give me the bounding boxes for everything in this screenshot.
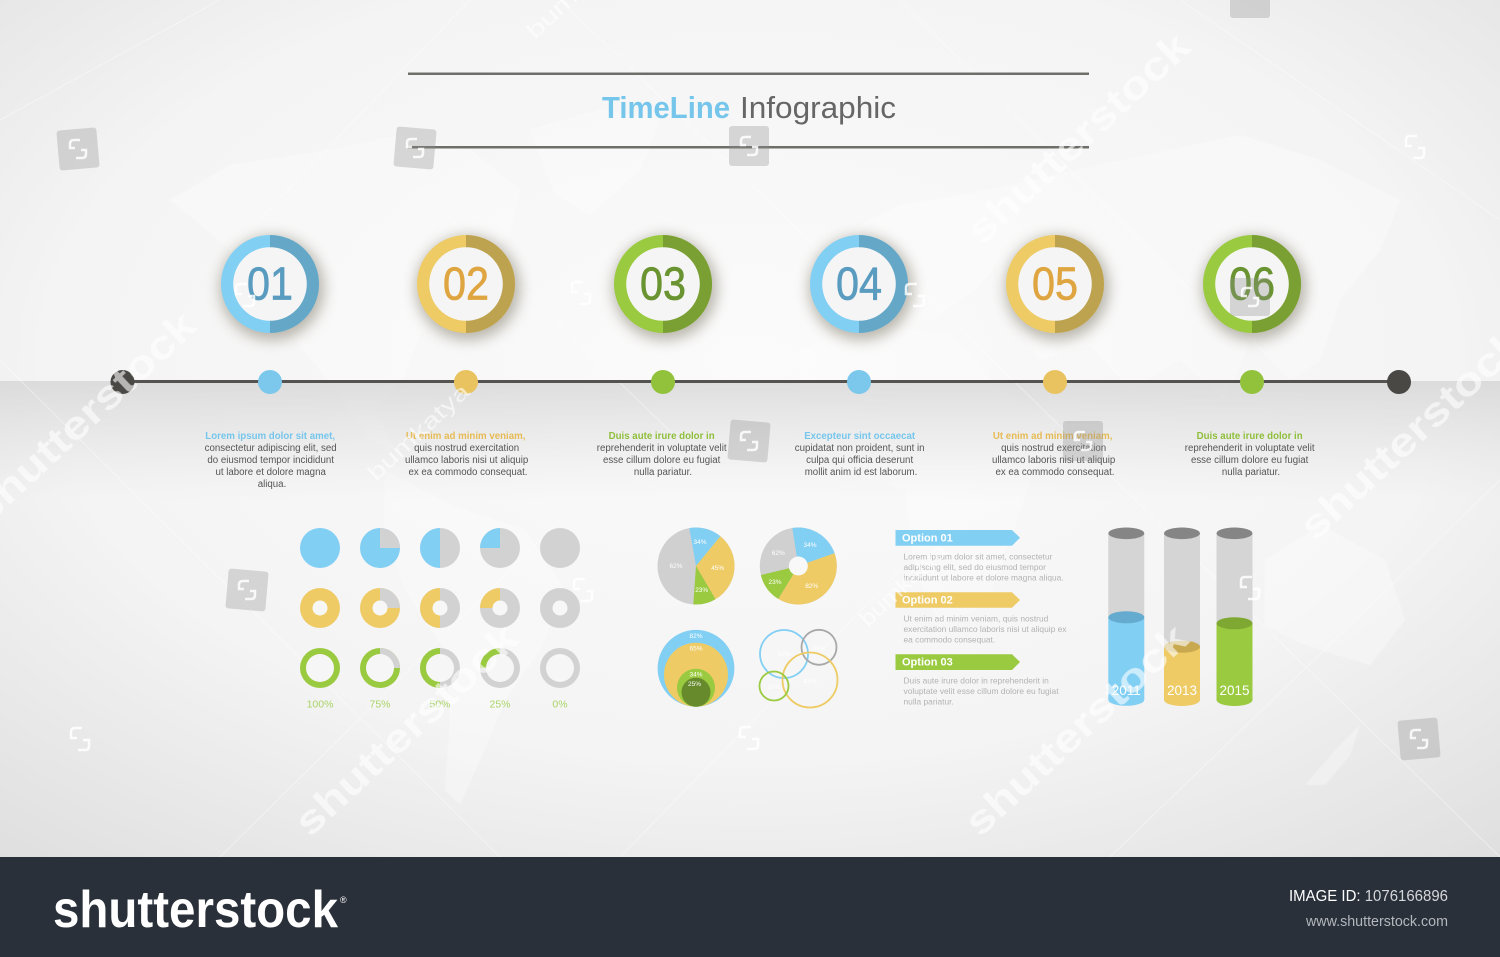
option 02 text: exercitation ullamco laboris nisi ut aliquip ex (904, 624, 1067, 634)
percentage labels: 0% (552, 698, 568, 710)
title (602, 90, 896, 125)
overlapping circles chart (760, 630, 838, 708)
world map background (170, 110, 1405, 805)
nested circle chart: 82% (689, 633, 703, 640)
percentage rings: green row (300, 648, 580, 688)
step text 05: ullamco laboris nisi ut aliquip (992, 455, 1115, 466)
option 03 arrow banner (896, 654, 1020, 670)
cylinder 2013: 2013 (1167, 683, 1197, 698)
watermark: stock logos and names: bumkatya (854, 538, 952, 632)
pie chart 1: 34% (693, 539, 707, 546)
option 01 text: Lorem ipsum dolor sit amet, consectetur (904, 552, 1053, 562)
watermark: stock logos and names: bumkatya (362, 378, 475, 486)
band below timeline (0, 381, 1500, 501)
option 01 text: incididunt ut labore et dolore magna aliqua. (904, 572, 1064, 582)
title: Infographic (740, 90, 896, 125)
step text 03: Duis aute irure dolor in (609, 431, 715, 442)
option 01 label: Option 01 (902, 532, 953, 544)
nested circle chart: 25% (688, 681, 701, 688)
step badge 01: 01 (247, 258, 293, 310)
option 02 (896, 592, 1069, 644)
cylinder 2015: 2015 (1219, 683, 1250, 698)
step text 03: esse cillum dolore eu fugiat (603, 455, 721, 466)
pie chart 1: 62% (669, 563, 683, 570)
watermark: swirl marks (70, 136, 1427, 750)
option 02 text: Ut enim ad minim veniam, quis nostrud (904, 614, 1049, 624)
step text 05: ex ea commodo consequat. (995, 467, 1115, 478)
step text 06: Duis aute irure dolor in (1197, 431, 1303, 442)
percentage labels: 50% (429, 698, 451, 710)
step text 04: mollit anim id est laborum. (805, 467, 917, 478)
percentage labels: 100% (307, 698, 333, 710)
option 03 label: Option 03 (902, 656, 953, 668)
cylinder 2011: 2011 (1112, 683, 1141, 698)
option 03 text: nulla pariatur. (904, 696, 954, 706)
title rule bottom (408, 146, 1089, 148)
timeline marker 06 (1240, 370, 1264, 394)
step text 02: quis nostrud exercitation (414, 443, 519, 454)
nested circle chart: 65% (689, 646, 703, 652)
step badge 05: 05 (1032, 258, 1078, 310)
percentage labels (307, 698, 568, 710)
step text 03: reprehenderit in voluptate velit (597, 443, 727, 454)
step badge 03: 03 (640, 258, 686, 310)
step text 01: do eiusmod tempor incididunt (207, 455, 334, 466)
overlapping circles chart: 23% (767, 684, 781, 691)
option 01 text: adipiscing elit, sed do eiusmod tempor (904, 562, 1046, 572)
step badge 03 (613, 235, 717, 340)
step text 01: aliqua. (258, 479, 286, 490)
overlapping circles chart: 82% (803, 678, 817, 685)
nested circle chart (658, 630, 734, 707)
footer bar (0, 857, 1500, 957)
step badge 02: 02 (443, 258, 489, 310)
option 03 text: Duis aute irure dolor in reprehenderit in (904, 676, 1049, 686)
option 03 text: voluptate velit esse cillum dolore eu fugiat (904, 686, 1059, 696)
cylinder 2015 (1216, 528, 1252, 706)
footer image id: IMAGE ID: 1076166896 (1289, 888, 1448, 905)
step text 02: Ut enim ad minim veniam, (406, 431, 526, 442)
timeline marker 02 (454, 370, 478, 394)
step text 02: ex ea commodo consequat. (408, 467, 528, 478)
overlapping circles chart: 34% (812, 645, 826, 652)
watermark: stock logos and names: shutterstock (286, 615, 527, 845)
donut pie chart 2 (760, 528, 837, 604)
overlapping circles chart: 62% (777, 651, 791, 658)
percentage labels: 25% (489, 698, 511, 710)
timeline marker 03 (651, 370, 675, 394)
step text 05: quis nostrud exercitation (1001, 443, 1106, 454)
option 03 (896, 654, 1061, 706)
step text 01: consectetur adipiscing elit, sed (205, 443, 337, 454)
nested circle chart: 34% (689, 672, 703, 678)
option 02 arrow banner (896, 592, 1020, 608)
option 01 (896, 530, 1064, 582)
title rule top (408, 72, 1089, 75)
step text 05: Ut enim ad minim veniam, (993, 431, 1113, 442)
step text 01: ut labore et dolore magna (215, 467, 326, 478)
step badge 06: 06 (1229, 258, 1275, 310)
timeline axis (110, 370, 1411, 394)
step badge 04 (809, 235, 913, 340)
option 02 label: Option 02 (902, 594, 953, 606)
percentage labels: 75% (369, 698, 391, 710)
donut pie chart 2: 34% (803, 542, 817, 549)
cylinder 2011 (1108, 528, 1144, 706)
percentage pies: blue row (300, 528, 580, 568)
timeline marker 05 (1043, 370, 1067, 394)
title: TimeLine (602, 90, 730, 125)
option 02 text: ea commodo consequat. (904, 634, 995, 644)
watermark: stock logos and names: shutterstock (1291, 319, 1500, 549)
timeline start dot (110, 370, 134, 394)
watermark: stock logos and names: shutterstock (956, 615, 1197, 845)
donut pie chart 2: 82% (805, 583, 818, 590)
step text 03: nulla pariatur. (634, 467, 692, 478)
step text 04: culpa qui officia deserunt (806, 455, 913, 466)
step text 04: cupidatat non proident, sunt in (795, 443, 925, 454)
pie chart 1 (658, 528, 735, 604)
step text 06: reprehenderit in voluptate velit (1185, 443, 1315, 454)
step text 04: Excepteur sint occaecat (804, 431, 916, 442)
watermark: stock logos and names: shutterstock (958, 23, 1199, 253)
donut pie chart 2: 23% (768, 579, 782, 586)
timeline marker 01 (258, 370, 282, 394)
step text 06: esse cillum dolore eu fugiat (1191, 455, 1309, 466)
step badge 05 (1005, 235, 1109, 340)
step text 06: nulla pariatur. (1222, 467, 1280, 478)
watermark: grey squares (56, 0, 1441, 761)
footer url: www.shutterstock.com (1305, 914, 1448, 930)
step badge 02 (416, 235, 520, 340)
footer registered mark: ® (340, 895, 347, 905)
timeline marker 04 (847, 370, 871, 394)
footer logo: shutterstock (53, 881, 338, 939)
timeline end dot (1387, 370, 1411, 394)
pie chart 1: 45% (711, 565, 724, 572)
step badge 01 (220, 235, 324, 340)
percentage donuts: yellow row (300, 588, 580, 628)
step text 02: ullamco laboris nisi ut aliquip (405, 455, 528, 466)
step text 01: Lorem ipsum dolor sit amet, (205, 431, 335, 442)
step badge 06 (1202, 235, 1306, 340)
pie chart 1: 23% (695, 587, 708, 594)
cylinder 2013 (1164, 528, 1200, 706)
step badge 04: 04 (836, 258, 882, 310)
option 01 arrow banner (896, 530, 1020, 546)
donut pie chart 2: 62% (772, 550, 785, 557)
